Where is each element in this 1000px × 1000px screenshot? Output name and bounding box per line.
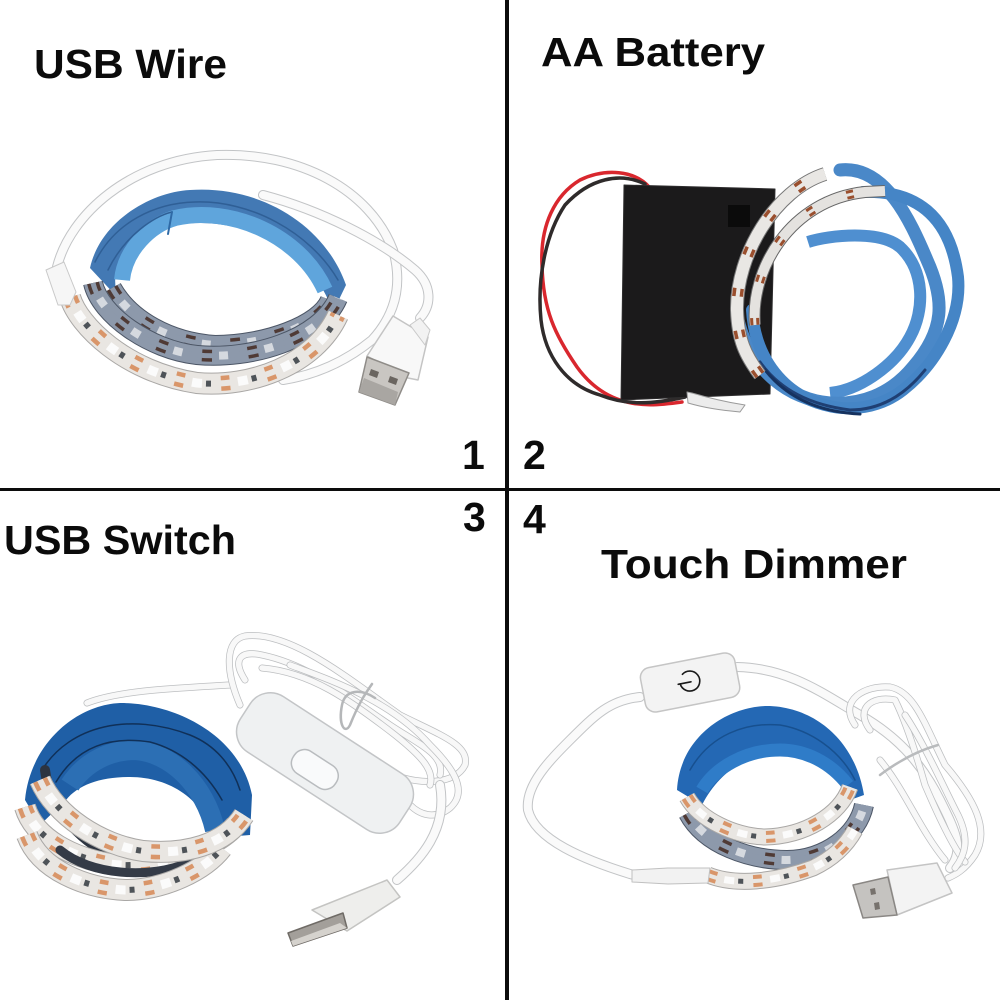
panel: USB Switch (4, 494, 486, 946)
connector sleeve (687, 392, 745, 412)
number 1: 1 (462, 432, 485, 478)
heading: USB Switch: USB Switch (4, 517, 236, 563)
battery box (621, 185, 775, 400)
LED strip: white LED section (737, 174, 885, 375)
heading: Touch Dimmer: Touch Dimmer (601, 541, 907, 587)
cable bundle (87, 636, 466, 880)
rocker button (287, 745, 343, 794)
cable and coil (528, 667, 981, 878)
USB plug (359, 316, 430, 405)
cable: white USB cable (57, 155, 428, 380)
wires: red and black leads (540, 172, 685, 405)
USB plug (853, 863, 952, 918)
panel: USB Wire (34, 41, 485, 478)
LED strip coil: lower turns with LEDs (70, 283, 338, 384)
icon: power symbol (676, 669, 701, 693)
number 2: 2 (523, 432, 546, 478)
LED strip coil: blue backing (25, 703, 252, 838)
strip end cap (46, 262, 76, 305)
number 4: 4 (523, 496, 546, 542)
inline rocker switch (227, 684, 423, 842)
heat-shrink sleeve (632, 868, 710, 884)
panel: Touch Dimmer (523, 496, 981, 918)
LED strip coil: lower turns with LEDs (25, 770, 244, 890)
touch dimmer module (639, 651, 742, 714)
number 3: 3 (463, 494, 486, 540)
panel: AA Battery (523, 29, 958, 478)
heading: AA Battery: AA Battery (541, 29, 765, 75)
heading: USB Wire: USB Wire (34, 41, 227, 87)
LED strip coil: lower turns with LEDs (687, 787, 864, 881)
USB plug (288, 880, 400, 946)
LED strip coil: blue backing (677, 706, 864, 805)
LED strip coil: blue backing (90, 190, 346, 312)
LED strip: blue loops (738, 170, 958, 414)
